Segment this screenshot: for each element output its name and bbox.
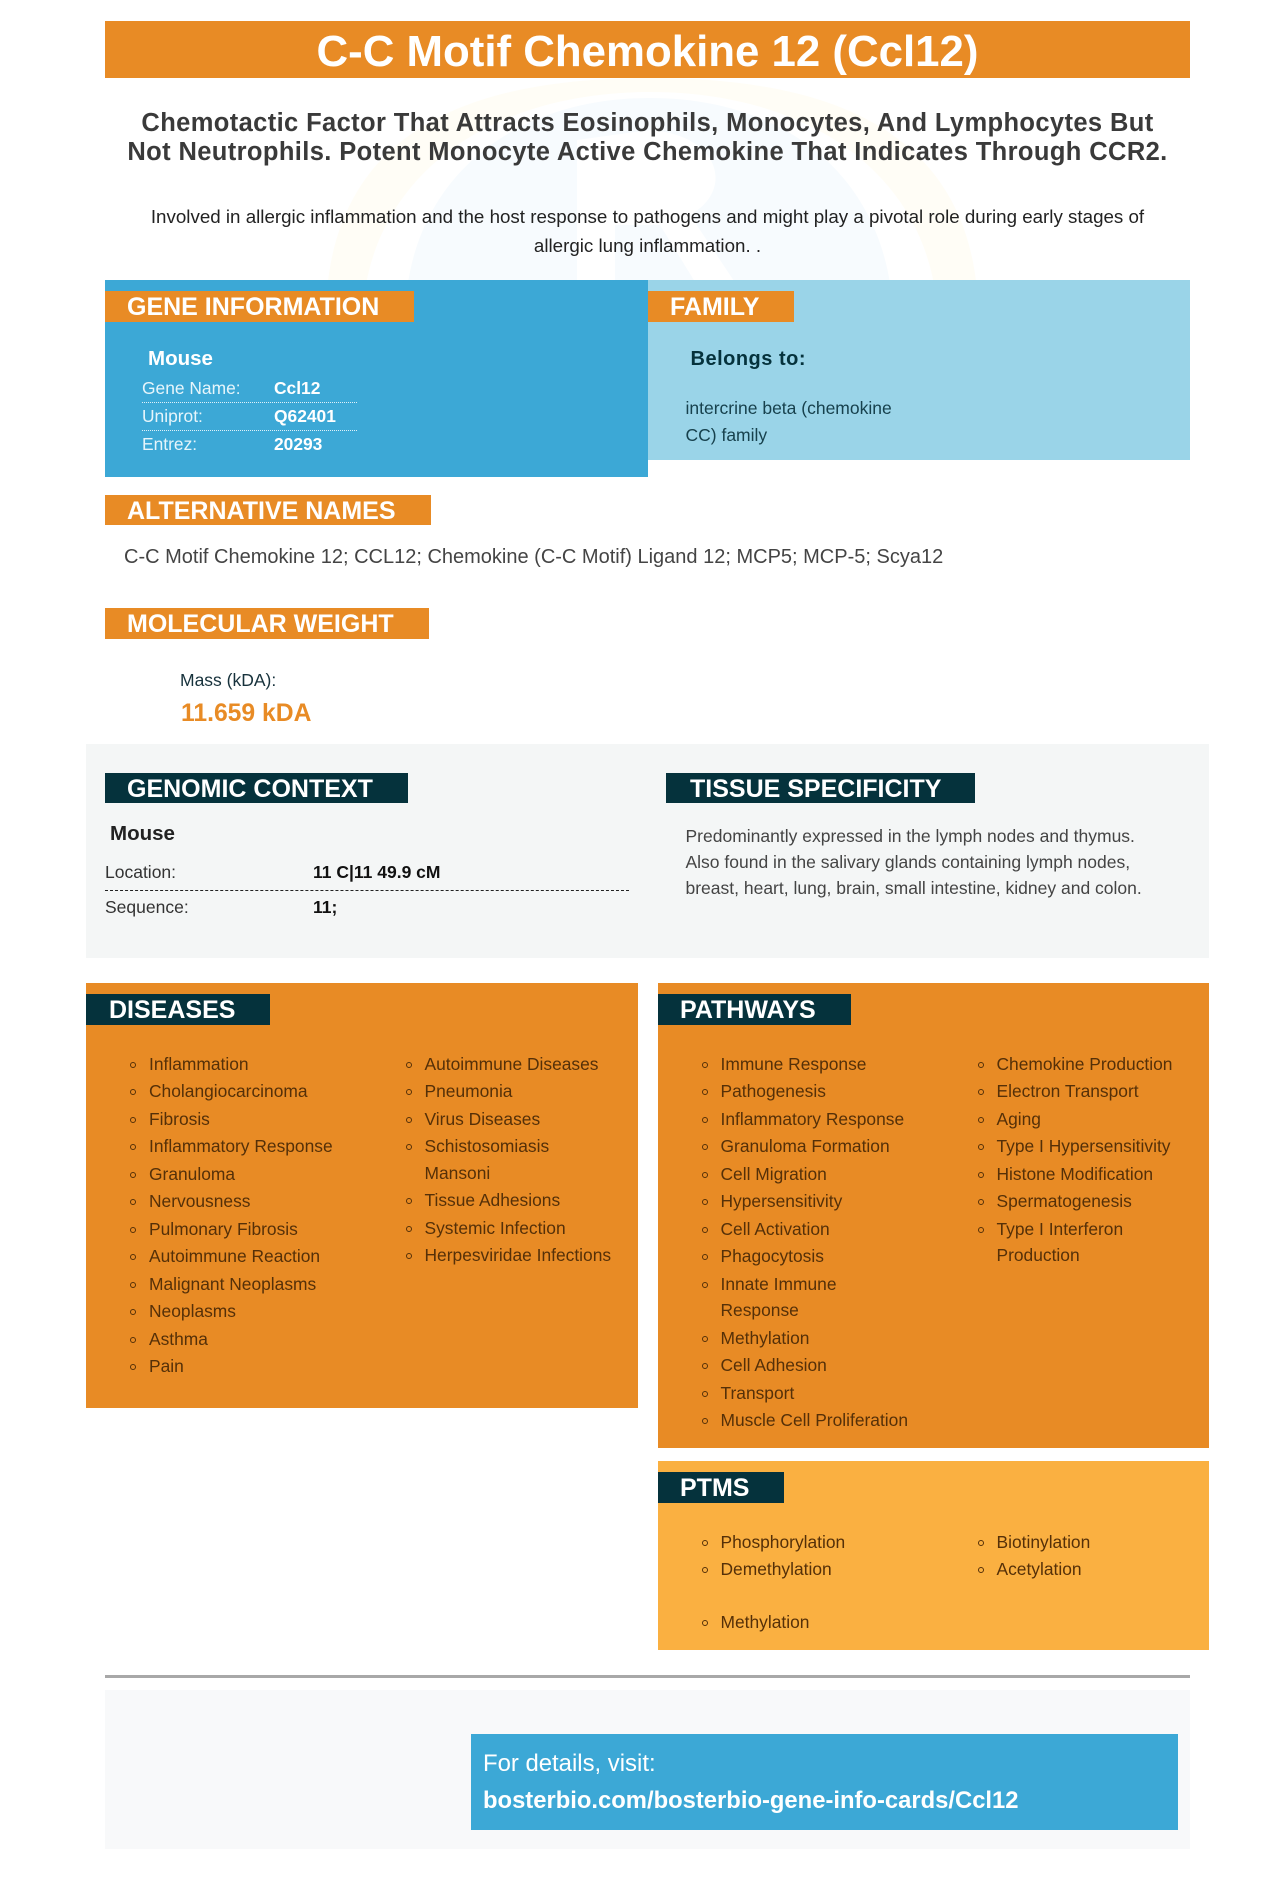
family text (686, 398, 892, 445)
disease list column 2: Pneumonia (424, 1081, 512, 1101)
pathway list column 1: Inflammatory Response (720, 1109, 904, 1129)
family text: CC) family (686, 425, 767, 445)
pathway list column 1: Transport (720, 1383, 794, 1403)
disease list column 1: Autoimmune Reaction (149, 1246, 320, 1266)
description (151, 206, 1144, 256)
gene table: 20293 (274, 434, 322, 454)
heading: PTMs (658, 1472, 784, 1503)
panel: genomic context and tissue specificity (86, 744, 1209, 958)
belongs to label: Belongs to: (690, 348, 806, 370)
disease list column 2 (406, 1054, 611, 1265)
panel: diseases (86, 983, 638, 1408)
disease list column 1: Nervousness (149, 1191, 250, 1211)
panel: footer (105, 1690, 1190, 1849)
tissue specificity text: Predominantly expressed in the lymph nodes and thymus. (686, 826, 1135, 846)
panel: PTMs (658, 1461, 1209, 1650)
gene table: Gene Name: (142, 378, 241, 398)
disease list column 2: Systemic Infection (424, 1218, 566, 1238)
genomic table: Sequence: (105, 897, 189, 917)
heading: diseases (86, 994, 270, 1025)
pathway list column 2: Type I Hypersensitivity (996, 1136, 1170, 1156)
subtitle: Chemotactic Factor That Attracts Eosinophils, Monocytes, And Lymphocytes But (141, 108, 1154, 136)
PTM list column 2: Acetylation (996, 1559, 1082, 1579)
pathway list column 2 (978, 1054, 1172, 1265)
species label: Mouse (148, 347, 213, 370)
pathway list column 1: Response (720, 1300, 799, 1320)
PTM list column 1: Demethylation (720, 1559, 832, 1579)
disease list column 1: Inflammation (149, 1054, 249, 1074)
pathway list column 2: Histone Modification (996, 1164, 1153, 1184)
pathway list column 1: Cell Migration (720, 1164, 827, 1184)
disease list column 1 (130, 1054, 333, 1376)
panel: family (648, 280, 1190, 460)
title: C-C Motif Chemokine 12 (Ccl12) (317, 27, 978, 76)
callout: details link (471, 1734, 1178, 1830)
pathway list column 1: Muscle Cell Proliferation (720, 1410, 908, 1430)
subtitle (127, 108, 1168, 166)
disease list column 1: Fibrosis (149, 1109, 210, 1129)
tissue specificity text: Also found in the salivary glands containing lymph nodes, (686, 852, 1130, 872)
heading: family (648, 291, 794, 322)
PTM list column 1 (702, 1532, 845, 1632)
description: Involved in allergic inflammation and the host response to pathogens and might play a pivotal role during early stages of (151, 206, 1144, 227)
heading: family: FAMILY (670, 293, 759, 321)
family text: intercrine beta (chemokine (686, 398, 892, 418)
disease list column 1: Granuloma (149, 1164, 235, 1184)
disease list column 2: Virus Diseases (424, 1109, 540, 1129)
tissue specificity text (686, 826, 1142, 898)
genomic table: Location: (105, 862, 176, 882)
pathway list column 1: Pathogenesis (720, 1081, 826, 1101)
disease list column 2: Herpesviridae Infections (424, 1245, 611, 1265)
disease list column 1: Pulmonary Fibrosis (149, 1219, 298, 1239)
pathway list column 1 (702, 1054, 908, 1430)
callout: details link: For details, visit: (483, 1750, 656, 1777)
heading: PTMs: PTMS (680, 1474, 749, 1502)
heading: molecular weight: MOLECULAR WEIGHT (127, 610, 394, 638)
disease list column 1: Asthma (149, 1329, 208, 1349)
callout: details link: bosterbio.com/bosterbio-gene-info-cards/Ccl12 (483, 1787, 1019, 1814)
disease list column 2: Autoimmune Diseases (424, 1054, 598, 1074)
description: allergic lung inflammation. . (534, 235, 761, 256)
pathway list column 1: Cell Adhesion (720, 1355, 827, 1375)
title (105, 21, 1190, 78)
pathway list column 1: Immune Response (720, 1054, 866, 1074)
mass value: 11.659 kDA (181, 700, 311, 727)
genomic table: 11 C|11 49.9 cM (313, 862, 440, 882)
heading: genomic context: GENOMIC CONTEXT (127, 775, 373, 803)
gene table (142, 378, 357, 454)
gene table: Entrez: (142, 434, 197, 454)
heading: alternative names: ALTERNATIVE NAMES (127, 497, 396, 525)
pathway list column 1: Cell Activation (720, 1219, 830, 1239)
pathway list column 1: Granuloma Formation (720, 1136, 890, 1156)
subtitle: Not Neutrophils. Potent Monocyte Active Chemokine That Indicates Through CCR2. (127, 138, 1168, 166)
disease list column 1: Pain (149, 1356, 184, 1376)
genomic table: 11; (313, 897, 337, 917)
species label: Mouse (110, 822, 175, 845)
gene table: Ccl12 (274, 378, 320, 398)
tissue specificity text: breast, heart, lung, brain, small intestine, kidney and colon. (686, 878, 1142, 898)
panel: pathways (658, 983, 1209, 1448)
pathway list column 2: Electron Transport (996, 1081, 1139, 1101)
gene table: Q62401 (274, 406, 336, 426)
heading: pathways: PATHWAYS (680, 996, 816, 1024)
pathway list column 2: Type I Interferon (996, 1219, 1123, 1239)
disease list column 1: Malignant Neoplasms (149, 1274, 316, 1294)
disease list column 1: Cholangiocarcinoma (149, 1081, 308, 1101)
pathway list column 2: Chemokine Production (996, 1054, 1172, 1074)
heading: gene information: GENE INFORMATION (127, 293, 379, 321)
disease list column 1: Neoplasms (149, 1301, 236, 1321)
pathway list column 1: Phagocytosis (720, 1246, 824, 1266)
heading: pathways (658, 994, 851, 1025)
mass label: Mass (kDA): (180, 670, 276, 690)
PTM list column 1: Methylation (720, 1612, 809, 1632)
disease list column 2: Mansoni (424, 1163, 490, 1183)
background watermark logo (328, 78, 976, 280)
pathway list column 1: Innate Immune (720, 1274, 837, 1294)
genomic table (105, 862, 629, 917)
PTM list column 2 (978, 1532, 1090, 1579)
heading: diseases: DISEASES (109, 996, 235, 1024)
PTM list column 1: Phosphorylation (720, 1532, 845, 1552)
heading: tissue specificity: TISSUE SPECIFICITY (690, 775, 941, 803)
gene table: Uniprot: (142, 406, 203, 426)
pathway list column 2: Production (996, 1245, 1080, 1265)
pathway list column 1: Hypersensitivity (720, 1191, 842, 1211)
disease list column 2: Schistosomiasis (424, 1136, 549, 1156)
disease list column 2: Tissue Adhesions (424, 1190, 560, 1210)
PTM list column 2: Biotinylation (996, 1532, 1090, 1552)
alternative names text: C-C Motif Chemokine 12; CCL12; Chemokine (C-C Motif) Ligand 12; MCP5; MCP-5; Scya12 (124, 546, 943, 568)
pathway list column 2: Spermatogenesis (996, 1191, 1132, 1211)
pathway list column 1: Methylation (720, 1328, 809, 1348)
panel: gene information (105, 280, 648, 477)
pathway list column 2: Aging (996, 1109, 1041, 1129)
disease list column 1: Inflammatory Response (149, 1136, 333, 1156)
